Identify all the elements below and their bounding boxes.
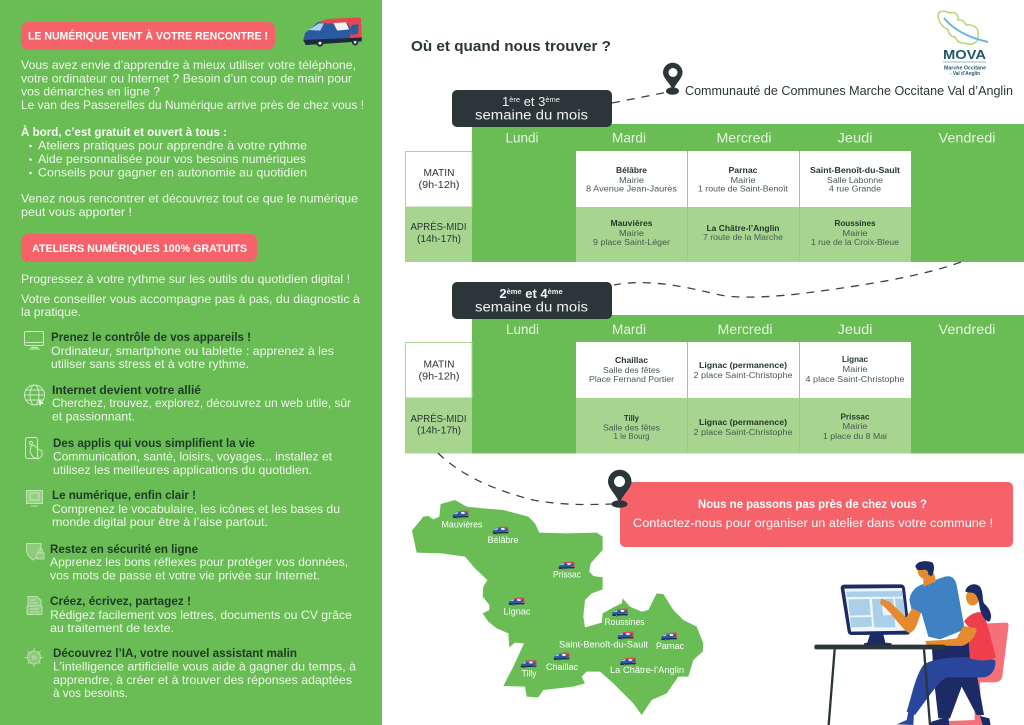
row label: après-midi: APRÈS-MIDI — [410, 412, 466, 425]
table header: Jeudi — [838, 130, 872, 146]
map markers: Tilly — [521, 660, 537, 680]
map markers: Mauvières: Mauvières — [442, 520, 483, 530]
badge: 2ème et 4ème semaine du mois: semaine du mois — [475, 300, 588, 314]
table header: Mercredi — [718, 322, 772, 337]
item: restez en sécurité: Apprenez les bons réflexes pour protéger vos données, — [50, 555, 348, 569]
arrow: dashed link between tables — [614, 262, 961, 297]
text block: venez nous rencontrer: peut vous apporter ! — [21, 205, 132, 219]
text block: introduction: votre ordinateur ou Internet ? Besoin d’un coup de main pour — [21, 72, 352, 86]
item: internet devient votre allié: et passionnant. — [52, 410, 135, 424]
badge: 1ère et 3ème semaine du mois: et 3 — [520, 94, 545, 109]
map markers: Chaillac — [546, 653, 578, 673]
item: des applis: utilisez les meilleures applications du quotidien. — [53, 463, 312, 477]
cell: Bélâbre: 8 Avenue Jean-Jaurès — [586, 184, 677, 194]
cell: Lignac permanence matin: 2 place Saint-Christophe — [694, 370, 793, 380]
cell: Lignac permanence matin: Lignac (permanence) — [699, 360, 787, 370]
row label: après-midi: (14h-17h) — [417, 233, 461, 245]
text block: à bord: Aide personnalisée pour vos besoins numériques — [38, 152, 306, 166]
text block: introduction: vos démarches en ligne ? — [21, 84, 160, 98]
cell: Tilly: Tilly — [624, 413, 639, 423]
cell: Roussines: Mairie — [842, 228, 868, 238]
map markers: Roussines — [604, 609, 645, 628]
callout: nous ne passons pas près: Nous ne passons pas près de chez vous ? — [698, 499, 927, 511]
text block: introduction: Vous avez envie d’apprendre à mieux utiliser votre téléphone, — [21, 58, 356, 72]
cell: La Châtre-l'Anglin — [688, 207, 799, 262]
map markers: Saint-Benoît-du-Sault: Saint-Benoît-du-Sault — [559, 640, 648, 650]
map markers: Chaillac: Chaillac — [546, 662, 578, 673]
map markers: La Châtre-l'Anglin — [610, 658, 684, 676]
cell: Tilly: Salle des fêtes — [603, 422, 660, 432]
arrow: dashed link to pin — [612, 92, 668, 103]
cell: Prissac: 1 place du 8 Mai — [823, 431, 887, 441]
table header: Mardi — [612, 130, 646, 146]
illustration: two people at computer — [814, 561, 1008, 725]
cell: Parnac: Parnac — [728, 165, 758, 175]
cell: Prissac — [800, 398, 911, 454]
text: communauté de communes: Communauté de Communes Marche Occitane Val d’Anglin — [685, 84, 1013, 98]
icon: monitor — [24, 332, 44, 349]
title: Où et quand nous trouver ? — [411, 38, 611, 55]
row label: matin: MATIN — [424, 358, 454, 370]
man neck and head — [923, 573, 936, 587]
row label: matin — [406, 342, 472, 398]
badge: 2ème et 4ème semaine du mois: 2 — [499, 286, 507, 301]
table header: Jeudi — [838, 322, 872, 337]
row label: après-midi: APRÈS-MIDI — [410, 220, 466, 233]
row label: matin: (9h-12h) — [418, 370, 460, 382]
text block: progressez: Progressez à votre rythme sur les outils du quotidien digital ! — [21, 272, 350, 286]
arrow: dashed link to map pin — [438, 453, 612, 505]
icon: AI chip — [24, 648, 44, 667]
text block: venez nous rencontrer — [21, 192, 358, 219]
heading: le numérique vient à votre rencontre — [21, 22, 275, 50]
cell: Lignac permanence après-midi: 2 place Saint-Christophe — [694, 427, 793, 437]
logo: MOVA: MOVA — [943, 47, 987, 62]
icon: digital screen — [26, 490, 42, 506]
cell: Chaillac: Place Fernand Portier — [589, 374, 674, 384]
map markers: Tilly: Tilly — [522, 668, 537, 680]
row label: matin: MATIN — [424, 167, 454, 179]
logo: MOVA: - Val d’Anglin — [950, 71, 981, 77]
row label: matin — [406, 152, 472, 207]
item: internet devient votre allié: Cherchez, trouvez, explorez, découvrez un web utile, sûr — [52, 396, 351, 410]
icon: location pin top — [663, 63, 682, 95]
map markers: Bélâbre: Bélâbre — [488, 535, 518, 546]
text block: à bord: À bord, c’est gratuit et ouvert à tous : — [21, 125, 227, 139]
cell: Bélâbre: Bélâbre — [616, 165, 647, 175]
cell: Lignac permanence après-midi — [688, 398, 799, 454]
item: créez écrivez partagez: au traitement de texte. — [50, 621, 174, 635]
text block: progressez: la pratique. — [21, 305, 81, 319]
heading: le numérique vient à votre rencontre: LE NUMÉRIQUE VIENT À VOTRE RENCONTRE ! — [28, 30, 268, 42]
cell: Prissac: Prissac — [840, 412, 870, 422]
item: le numérique enfin clair: monde digital pour être à l’aise partout. — [52, 515, 268, 529]
row label: après-midi — [405, 207, 472, 262]
cell: Mauvières: Mauvières — [610, 218, 653, 228]
cell: Parnac: Mairie — [730, 175, 756, 185]
icon: phone apps — [26, 438, 42, 459]
table header — [472, 315, 1024, 342]
woman legs — [907, 657, 995, 715]
cell: Lignac: 4 place Saint-Christophe — [806, 374, 905, 384]
item: des applis: Des applis qui vous simplifient la vie — [53, 436, 255, 450]
item: restez en sécurité: Restez en sécurité en ligne — [50, 542, 198, 556]
badge: 2ème et 4ème semaine du mois: ème — [507, 287, 522, 296]
callout: nous ne passons pas près: Contactez-nous pour organiser un atelier dans votre commune ! — [633, 518, 993, 530]
table header: Vendredi — [938, 322, 996, 337]
desk — [814, 645, 945, 649]
map markers: La Châtre-l'Anglin: La Châtre-l’Anglin — [610, 665, 684, 676]
cell: Roussines: Roussines — [834, 218, 876, 228]
item: internet devient votre allié: Internet devient votre allié — [52, 383, 201, 397]
cell: Tilly: 1 le Bourg — [614, 431, 650, 441]
cell: Roussines — [800, 207, 911, 262]
cell: Prissac: Mairie — [842, 421, 868, 431]
map markers: Mauvières — [442, 511, 483, 530]
map markers: Bélâbre — [488, 527, 518, 546]
panel: left green column — [0, 0, 382, 725]
table header: Lundi — [506, 322, 539, 337]
badge: 2ème et 4ème semaine du mois — [452, 282, 612, 319]
map markers: Parnac: Parnac — [656, 641, 684, 652]
item: prenez le contrôle: Prenez le contrôle de vos appareils ! — [51, 330, 251, 344]
row label: après-midi — [405, 398, 472, 454]
man torso — [909, 576, 964, 639]
cell: Lignac — [800, 342, 911, 398]
map markers: Prissac — [553, 562, 581, 580]
chair — [949, 623, 1008, 682]
cell: La Châtre-l'Anglin: La Châtre-l’Anglin — [706, 223, 780, 233]
badge: 1ère et 3ème semaine du mois: ème — [545, 95, 560, 104]
table header: Mardi — [612, 322, 646, 337]
table header: Lundi — [506, 130, 538, 146]
cell: La Châtre-l'Anglin: 7 route de la Marche — [703, 232, 783, 242]
monitor — [864, 634, 892, 645]
cell: Saint-Benoît-du-Sault — [800, 151, 911, 207]
cell: Mauvières: Mairie — [619, 228, 644, 238]
badge: 2ème et 4ème semaine du mois: et 4 — [522, 286, 548, 301]
badge: 1ère et 3ème semaine du mois — [452, 90, 612, 127]
cell: Chaillac — [576, 342, 687, 398]
woman torso — [964, 612, 996, 660]
text block: à bord — [21, 125, 307, 180]
map markers: Roussines: Roussines — [604, 617, 645, 628]
row label: matin: (9h-12h) — [418, 179, 460, 191]
item: le numérique enfin clair: Comprenez le vocabulaire, les icônes et les bases du — [52, 502, 340, 516]
logo: MOVA: Marche Occitane — [944, 66, 986, 72]
item: des applis — [53, 436, 333, 477]
cell: Tilly — [576, 398, 687, 454]
man arm — [880, 599, 921, 633]
icon: globe — [24, 385, 44, 407]
text block: introduction — [21, 58, 364, 112]
text block: progressez — [21, 272, 360, 319]
heading: ateliers numériques — [21, 234, 257, 262]
badge: 1ère et 3ème semaine du mois: semaine du mois — [475, 108, 588, 122]
cell: Lignac: Mairie — [842, 364, 868, 374]
badge: 2ème et 4ème semaine du mois: ème — [548, 287, 563, 296]
item: créez écrivez partagez — [50, 594, 352, 635]
item: le numérique enfin clair: Le numérique, enfin clair ! — [52, 488, 196, 502]
item: créez écrivez partagez: Rédigez facilement vos lettres, documents ou CV grâce — [50, 608, 352, 622]
logo: MOVA — [938, 11, 988, 77]
cell: Saint-Benoît-du-Sault: Saint-Benoît-du-Sault — [810, 165, 900, 175]
icon: security shield — [26, 544, 44, 560]
text block: à bord: Conseils pour gagner en autonomie au quotidien — [38, 166, 307, 180]
woman head — [966, 589, 979, 605]
text block: introduction: Le van des Passerelles du Numérique arrive près de chez vous ! — [21, 98, 364, 112]
table: 2ème et 4ème semaine — [405, 315, 1024, 454]
badge: 1ère et 3ème semaine du mois: 1 — [502, 94, 509, 109]
item: restez en sécurité — [50, 542, 348, 582]
map: territoire MOVA — [412, 500, 703, 715]
cell: Lignac permanence matin — [688, 342, 799, 398]
map markers: Lignac — [504, 598, 531, 618]
cell: Mauvières — [576, 207, 687, 262]
cell: Mauvières: 9 place Saint-Léger — [593, 237, 670, 247]
table header: Mercredi — [716, 130, 772, 146]
callout: nous ne passons pas près — [620, 482, 1013, 547]
item: internet devient votre allié — [52, 383, 351, 424]
text block: venez nous rencontrer: Venez nous rencontrer et découvrez tout ce que le numérique — [21, 192, 358, 206]
cell: Lignac: Lignac — [842, 354, 868, 364]
item: prenez le contrôle: Ordinateur, smartphone ou tablette : apprenez à les — [51, 344, 334, 358]
cell: Parnac: 1 route de Saint-Benoît — [698, 184, 789, 194]
text block: à bord: Ateliers pratiques pour apprendre à votre rythme — [38, 138, 307, 152]
cell: Parnac — [688, 151, 799, 207]
text block: progressez: Votre conseiller vous accompagne pas à pas, du diagnostic à — [21, 292, 360, 306]
cell: Lignac permanence après-midi: Lignac (permanence) — [699, 417, 787, 427]
map markers: Prissac: Prissac — [553, 570, 581, 580]
table header: Vendredi — [938, 130, 996, 146]
heading: ateliers numériques: ATELIERS NUMÉRIQUES 100% GRATUITS — [32, 242, 247, 255]
cell: Saint-Benoît-du-Sault: 4 rue Grande — [829, 184, 881, 194]
item: découvrez l'IA — [53, 646, 356, 700]
item: découvrez l'IA: L’intelligence artificielle vous aide à gagner du temps, à — [53, 660, 356, 674]
map markers: Parnac — [656, 633, 684, 652]
cell: Roussines: 1 rue de la Croix-Bleue — [811, 237, 899, 247]
item: des applis: Communication, santé, loisirs, voyages... installez et — [53, 450, 333, 464]
table header — [472, 124, 1024, 151]
woman arm — [925, 626, 977, 646]
icon: van — [303, 17, 362, 47]
badge: 1ère et 3ème semaine du mois: ère — [509, 95, 520, 104]
cell: Bélâbre — [576, 151, 687, 207]
item: prenez le contrôle — [51, 330, 334, 371]
map markers: Saint-Benoît-du-Sault — [559, 632, 648, 650]
item: découvrez l'IA: à vos besoins. — [53, 686, 128, 700]
icon: location pin map — [608, 470, 632, 508]
icon: document — [27, 596, 42, 614]
cell: Bélâbre: Mairie — [619, 175, 644, 185]
item: le numérique enfin clair — [52, 488, 340, 529]
item: restez en sécurité: vos mots de passe et votre vie privée sur Internet. — [50, 568, 320, 582]
item: découvrez l'IA: Découvrez l’IA, votre nouvel assistant malin — [53, 646, 297, 660]
item: prenez le contrôle: utiliser sans stress et à votre rythme. — [51, 357, 249, 371]
row label: après-midi: (14h-17h) — [417, 424, 461, 436]
cell: Chaillac: Chaillac — [615, 355, 648, 365]
cell: Chaillac: Salle des fêtes — [603, 365, 660, 375]
map markers: Lignac: Lignac — [504, 606, 531, 618]
cell: Saint-Benoît-du-Sault: Salle Labonne — [827, 175, 883, 185]
table: 1ère et 3ème semaine — [405, 124, 1024, 262]
man legs — [932, 642, 984, 718]
item: créez écrivez partagez: Créez, écrivez, partagez ! — [50, 594, 191, 608]
item: découvrez l'IA: apprendre, à créer et à trouver des réponses adaptées — [53, 673, 352, 687]
